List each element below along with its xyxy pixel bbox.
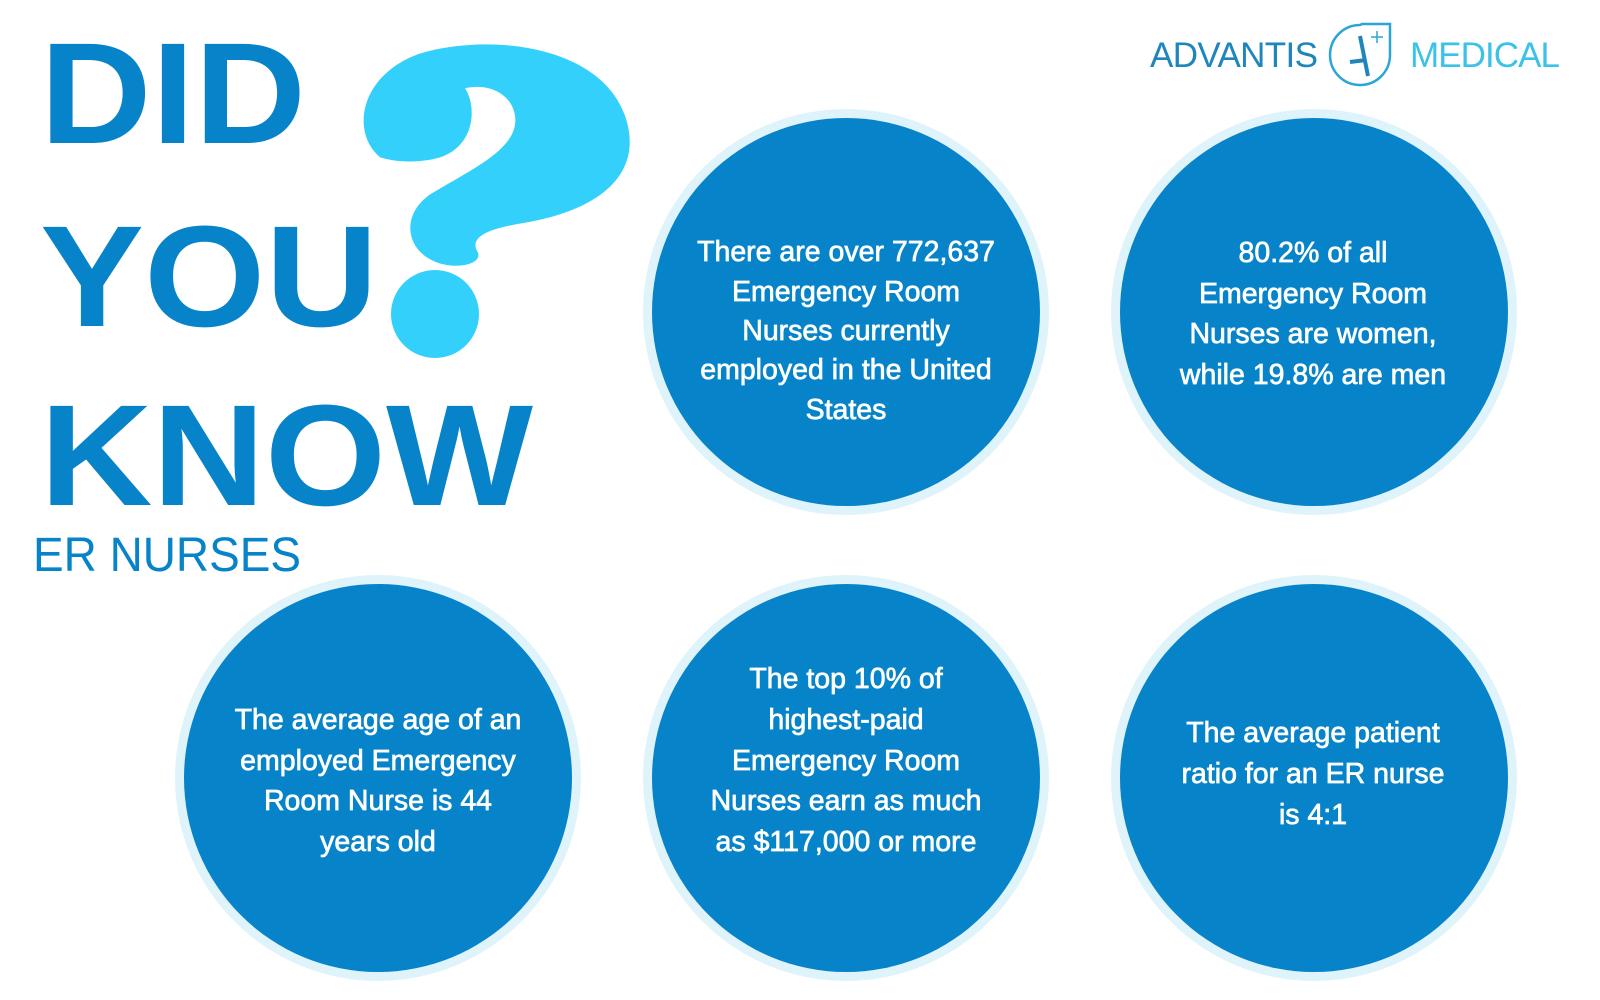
panel: circle 3 average age: The average age of an bbox=[235, 704, 521, 736]
panel: circle 5 patient ratio bbox=[1111, 575, 1517, 981]
panel: circle 4 salary: The top 10% of bbox=[749, 663, 943, 695]
panel: circle 1 employed count: Emergency Room bbox=[732, 276, 960, 308]
panel: circle 4 salary: as $117,000 or more bbox=[716, 826, 976, 858]
panel: circle 3 average age bbox=[175, 575, 581, 981]
logo: ADVANTIS bbox=[1150, 36, 1318, 75]
icon: question mark bbox=[364, 44, 630, 358]
panel: circle 2 gender: Emergency Room bbox=[1199, 278, 1427, 310]
panel: circle 1 employed count: States bbox=[806, 394, 886, 426]
logo: MEDICAL bbox=[1410, 36, 1560, 75]
panel: circle 4 salary: highest-paid bbox=[768, 704, 924, 736]
panel: circle 3 average age: employed Emergency bbox=[240, 745, 517, 777]
panel: circle 1 employed count bbox=[643, 109, 1049, 515]
panel: circle 5 patient ratio: ratio for an ER nurse bbox=[1182, 758, 1444, 790]
panel: circle 5 patient ratio: is 4:1 bbox=[1279, 799, 1347, 831]
panel: circle 4 salary: Emergency Room bbox=[732, 745, 960, 777]
title: DID YOU KNOW: DID bbox=[40, 13, 306, 174]
panel: circle 2 gender: while 19.8% are men bbox=[1179, 359, 1446, 391]
title: DID YOU KNOW bbox=[40, 13, 533, 536]
icon: logo mark bbox=[1330, 24, 1390, 85]
subtitle: ER NURSES: ER NURSES bbox=[33, 529, 301, 582]
panel: circle 4 salary: Nurses earn as much bbox=[711, 785, 981, 817]
panel: circle 4 salary bbox=[643, 575, 1049, 981]
title: DID YOU KNOW: YOU bbox=[40, 196, 378, 357]
panel: circle 5 patient ratio: The average patient bbox=[1186, 717, 1440, 749]
logo bbox=[1150, 24, 1560, 85]
panel: circle 1 employed count: There are over 772,637 bbox=[697, 236, 995, 268]
panel: circle 2 gender: 80.2% of all bbox=[1239, 237, 1387, 269]
panel: circle 2 gender: Nurses are women, bbox=[1189, 318, 1437, 350]
panel: circle 2 gender bbox=[1111, 109, 1517, 515]
title: DID YOU KNOW: KNOW bbox=[40, 375, 533, 536]
panel: circle 1 employed count: Nurses currently bbox=[742, 315, 950, 347]
panel: circle 1 employed count: employed in the United bbox=[700, 354, 992, 386]
panel: circle 3 average age: Room Nurse is 44 bbox=[264, 785, 492, 817]
panel: circle 3 average age: years old bbox=[320, 826, 436, 858]
